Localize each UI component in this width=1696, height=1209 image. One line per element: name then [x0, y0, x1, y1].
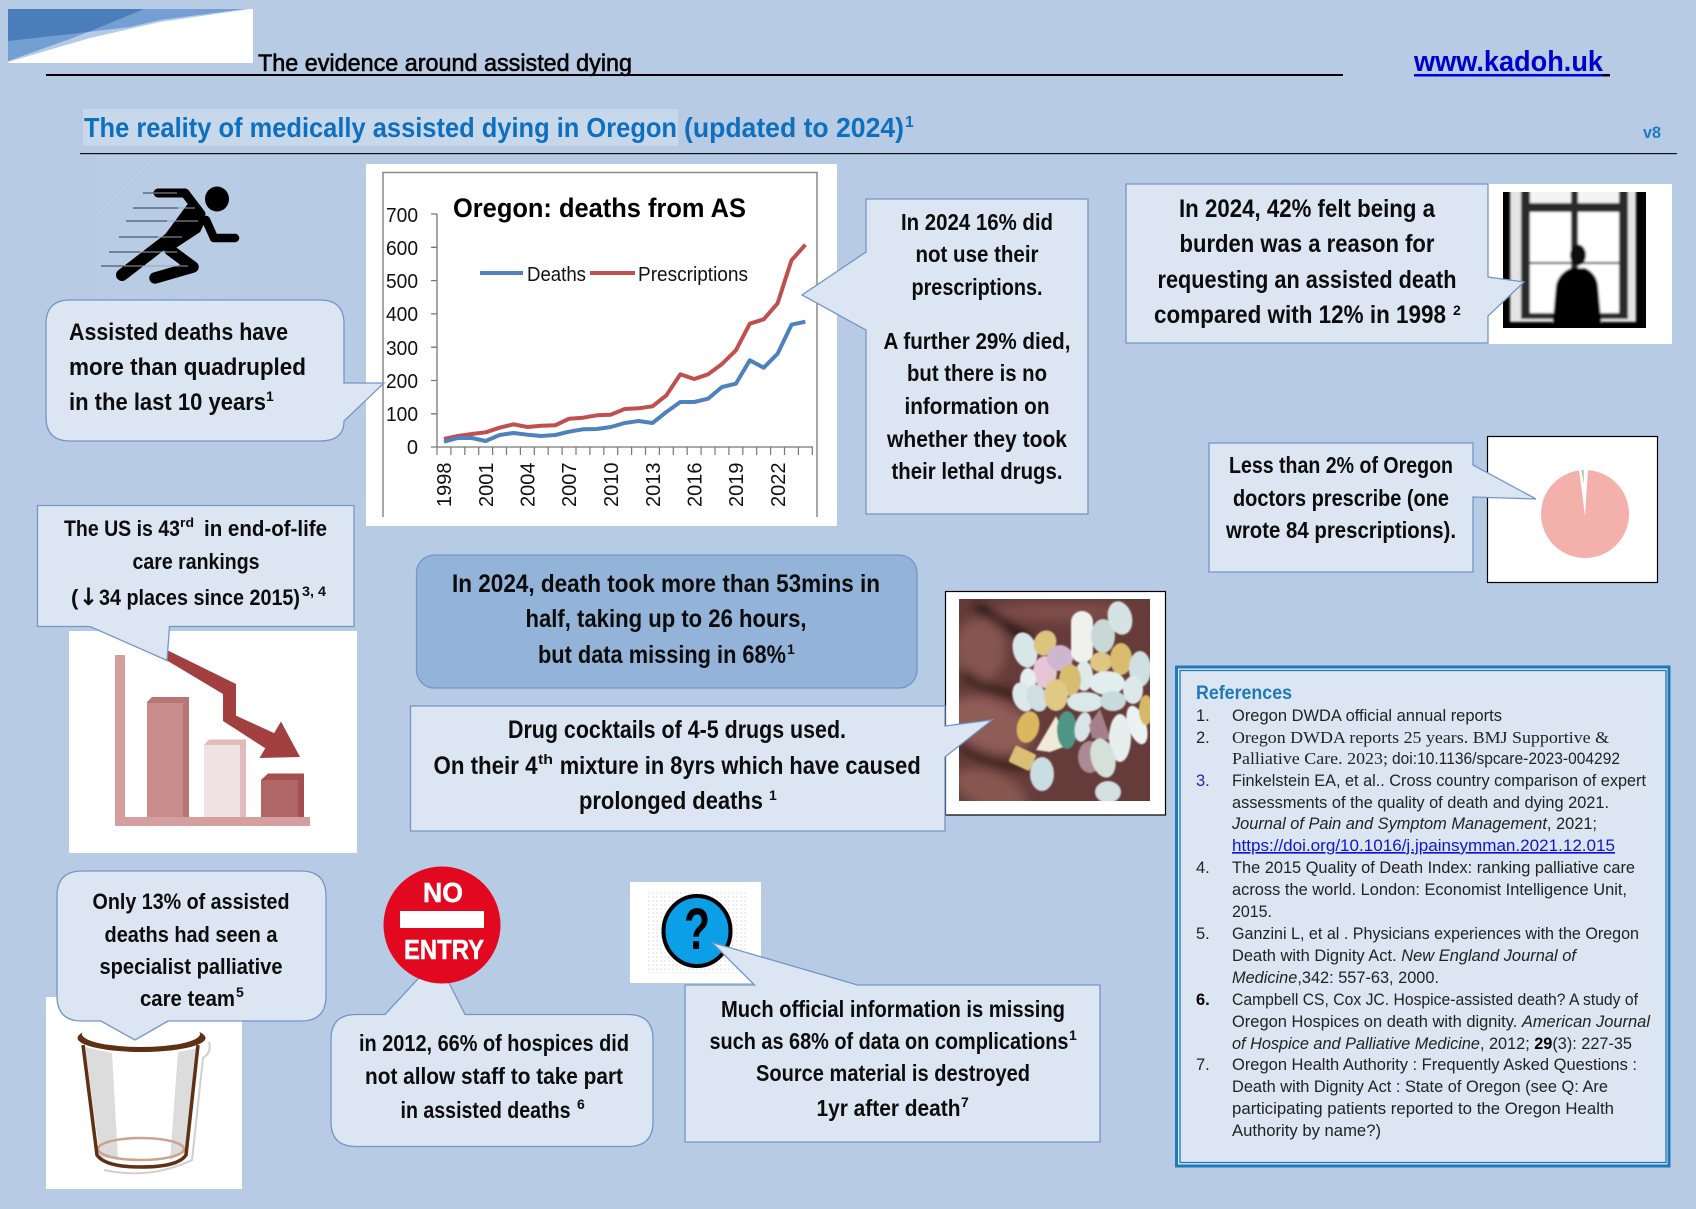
callout: official information missing: Source material is destroyed — [756, 1060, 1030, 1086]
chart axes: 0 — [407, 437, 418, 459]
references list: 2. — [1196, 729, 1210, 747]
callout: end-of-life care rankings: ↓ — [79, 583, 98, 611]
image: empty glass — [46, 997, 242, 1189]
icon: question mark: ? — [684, 897, 710, 962]
pie chart: doctors prescribing — [1488, 436, 1658, 582]
callout: time to death: In 2024, death took more than 53mins in — [452, 570, 880, 598]
chart legend: Prescriptions — [638, 264, 748, 286]
references list: participating patients reported to the Oregon Health — [1232, 1100, 1614, 1118]
callout: drug cocktails: th — [538, 751, 553, 767]
callout: official information missing: 7 — [961, 1094, 969, 1110]
chart legend — [480, 264, 748, 286]
references list: assessments of the quality of death and dying 2021. — [1232, 794, 1609, 812]
chart axes: 600 — [386, 238, 418, 260]
references list: 2015. — [1232, 903, 1272, 921]
header text: The evidence around assisted dying — [258, 50, 632, 77]
chart axes: 2022 — [768, 462, 790, 507]
chart axes: 2010 — [601, 462, 623, 507]
chart axes: 200 — [386, 371, 418, 393]
references list: Authority by name?) — [1232, 1122, 1381, 1140]
callout: felt being a burden: 2 — [1453, 302, 1461, 318]
callout: unused prescriptions: information on — [904, 393, 1050, 419]
references list: Oregon Hospices on death with dignity. American Journal — [1232, 1013, 1651, 1031]
references list: https://doi.org/10.1016/j.jpainsymman.2021.12.015 — [1232, 837, 1615, 855]
main title: (updated to 2024) — [684, 112, 904, 143]
callout: official information missing: 1yr after death — [816, 1095, 960, 1121]
callout: end-of-life care rankings: 3, 4 — [302, 583, 326, 599]
callout: less than 2% of doctors: wrote 84 prescriptions). — [1225, 517, 1456, 543]
references list: Oregon DWDA official annual reports — [1232, 707, 1502, 725]
callout: time to death — [416, 555, 917, 688]
callout: assisted deaths quadrupled: more than quadrupled — [69, 354, 306, 381]
callout: less than 2% of doctors: doctors prescribe (one — [1233, 485, 1449, 511]
references list: Journal of Pain and Symptom Management, 2021; — [1231, 815, 1597, 833]
chart axes: 1998 — [434, 462, 456, 507]
image: silhouette at window — [1488, 184, 1672, 344]
callout: assisted deaths quadrupled — [46, 300, 384, 441]
callout: drug cocktails — [410, 706, 992, 831]
callout: palliative care team — [57, 871, 326, 1040]
main title: 1 — [905, 114, 914, 131]
callout: unused prescriptions: In 2024 16% did — [901, 209, 1053, 235]
references list: Medicine,342: 557-63, 2000. — [1232, 969, 1439, 987]
callout: hospices — [331, 975, 653, 1146]
callout: less than 2% of doctors: Less than 2% of Oregon — [1229, 452, 1453, 478]
icon: falling bar chart — [69, 631, 357, 853]
references list: Death with Dignity Act : State of Oregon (see Q: Are — [1232, 1078, 1608, 1096]
references list: Finkelstein EA, et al.. Cross country comparison of expert — [1232, 772, 1646, 790]
references list: doi:10.1136/spcare-2023-004292 — [1392, 750, 1620, 768]
chart axes: 400 — [386, 304, 418, 326]
callout: official information missing: Much official information is missing — [721, 996, 1065, 1022]
callout: end-of-life care rankings: The US is 43 — [64, 516, 180, 541]
callout: time to death: half, taking up to 26 hours, — [526, 605, 806, 633]
chart axes: 500 — [386, 271, 418, 293]
chart axes: 2019 — [726, 462, 748, 507]
callout: unused prescriptions: their lethal drugs. — [892, 458, 1062, 484]
callout: felt being a burden: requesting an assisted death — [1158, 266, 1456, 294]
callout: end-of-life care rankings: in end-of-life — [204, 516, 327, 541]
references list: 5. — [1196, 925, 1210, 943]
series: prescriptions — [444, 245, 805, 439]
references list — [1196, 707, 1651, 1140]
callout: felt being a burden: burden was a reason for — [1180, 230, 1435, 258]
references heading: References — [1196, 683, 1292, 704]
references list: across the world. London: Economist Intelligence Unit, — [1232, 881, 1627, 899]
chart axes: 2007 — [559, 462, 581, 507]
chart axes: 2013 — [643, 462, 665, 507]
callout: drug cocktails: mixture in 8yrs which have caused — [560, 752, 921, 780]
chart axes — [386, 205, 813, 507]
references list: Death with Dignity Act. New England Journal of — [1232, 947, 1578, 965]
callout: unused prescriptions: A further 29% died, — [884, 328, 1070, 354]
line chart: Oregon deaths from AS — [366, 164, 837, 526]
references list: 6. — [1196, 991, 1210, 1009]
callout: drug cocktails: On their 4 — [434, 752, 538, 780]
chart axes: 2001 — [476, 462, 498, 507]
callout: palliative care team: 5 — [236, 984, 244, 1000]
callout: assisted deaths quadrupled: Assisted deaths have — [69, 319, 288, 346]
callout: drug cocktails: prolonged deaths — [579, 787, 763, 815]
callout: time to death: but data missing in 68% — [538, 641, 786, 669]
callout: official information missing: 1 — [1069, 1027, 1077, 1043]
callout: official information missing — [685, 942, 1100, 1142]
callout: felt being a burden — [1126, 184, 1524, 343]
callout: official information missing: such as 68% of data on complications — [710, 1028, 1068, 1054]
references list: 3. — [1196, 772, 1210, 790]
icon: no entry sign: NO — [423, 877, 463, 908]
callout: unused prescriptions: not use their — [916, 241, 1039, 267]
panel: references — [1176, 667, 1669, 1166]
chart axes: 2004 — [518, 462, 540, 507]
icon: no entry sign: ENTRY — [404, 934, 484, 965]
references list: 4. — [1196, 859, 1210, 877]
callout: less than 2% of doctors — [1209, 443, 1536, 572]
icon: running figure — [95, 156, 240, 298]
image: handful of pills — [939, 592, 1166, 820]
callout: end-of-life care rankings — [38, 506, 354, 660]
icon: no entry sign — [384, 866, 500, 984]
callout: palliative care team: Only 13% of assisted — [92, 889, 290, 914]
references list: 7. — [1196, 1056, 1210, 1074]
callout: end-of-life care rankings: care rankings — [132, 549, 260, 574]
callout: hospices: not allow staff to take part — [365, 1063, 623, 1089]
icon: question mark — [630, 882, 761, 983]
callout: hospices: in 2012, 66% of hospices did — [359, 1030, 629, 1056]
chart title: Oregon: deaths from AS — [453, 193, 746, 223]
logo banner — [8, 9, 253, 63]
callout: palliative care team: deaths had seen a — [104, 922, 278, 947]
callout: felt being a burden: compared with 12% in 1998 — [1154, 301, 1446, 329]
callout: palliative care team: care team — [140, 986, 235, 1011]
references list: Ganzini L, et al . Physicians experiences with the Oregon — [1232, 925, 1639, 943]
callout: unused prescriptions — [802, 199, 1088, 514]
references list: Oregon DWDA reports 25 years. BMJ Supportive & — [1232, 728, 1609, 747]
callout: assisted deaths quadrupled: in the last 10 years — [69, 389, 266, 416]
references list: Oregon Health Authority : Frequently Asked Questions : — [1232, 1056, 1637, 1074]
version tag: v8 — [1643, 123, 1661, 142]
chart axes: 2016 — [684, 462, 706, 507]
chart axes: 700 — [386, 205, 418, 227]
references list: Campbell CS, Cox JC. Hospice-assisted death? A study of — [1232, 991, 1638, 1009]
callout: drug cocktails: Drug cocktails of 4-5 drugs used. — [508, 716, 846, 744]
chart axes: 300 — [386, 338, 418, 360]
chart legend: Deaths — [527, 264, 586, 286]
callout: palliative care team: specialist palliative — [100, 954, 282, 979]
callout: hospices: 6 — [577, 1096, 585, 1112]
chart axes: 100 — [386, 404, 418, 426]
main title: The reality of medically assisted dying in Oregon — [84, 112, 677, 143]
references list: 1. — [1196, 707, 1210, 725]
references list: The 2015 Quality of Death Index: ranking palliative care — [1232, 859, 1635, 877]
callout: end-of-life care rankings: ( — [71, 585, 79, 610]
references list: Palliative Care. 2023; — [1232, 749, 1388, 768]
callout: unused prescriptions: but there is no — [907, 360, 1047, 386]
callout: end-of-life care rankings: 34 places since 2015) — [99, 585, 300, 610]
callout: hospices: in assisted deaths — [400, 1097, 570, 1123]
callout: unused prescriptions: prescriptions. — [912, 274, 1042, 300]
callout: felt being a burden: In 2024, 42% felt being a — [1179, 195, 1436, 223]
callout: time to death: 1 — [787, 641, 795, 657]
callout: unused prescriptions: whether they took — [886, 426, 1067, 452]
website link: www.kadoh.uk — [1413, 46, 1604, 78]
main title — [83, 109, 914, 146]
callout: end-of-life care rankings: rd — [180, 515, 194, 530]
callout: assisted deaths quadrupled: 1 — [266, 388, 274, 404]
references list: of Hospice and Palliative Medicine, 2012; 29(3): 227-35 — [1232, 1035, 1632, 1053]
series: deaths — [444, 322, 805, 442]
callout: drug cocktails: 1 — [769, 787, 777, 803]
